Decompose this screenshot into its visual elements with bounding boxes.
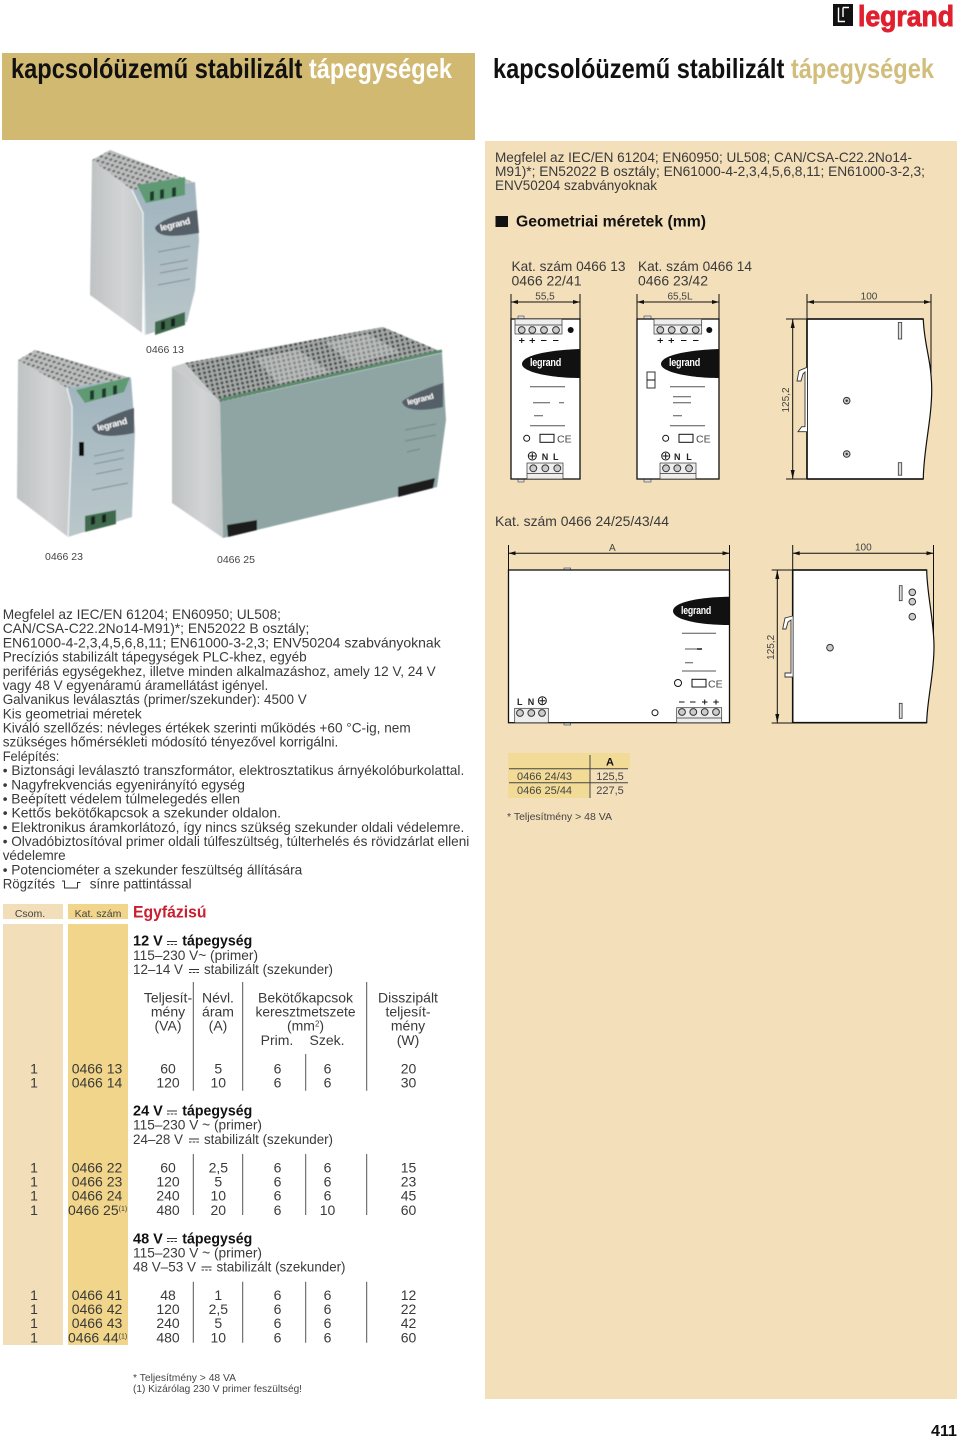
footnotes [133, 1372, 302, 1395]
table header and separators [144, 982, 438, 1091]
table header and separators: Teljesít- [144, 989, 192, 1005]
labels for drawing 0466 14: Kat. szám 0466 14 [638, 258, 752, 274]
photo: power supply 0466 25 [172, 327, 446, 538]
description text block: Megfelel az IEC/EN 61204; EN60950; UL508; [3, 606, 281, 622]
rows: 24 V: 6 [324, 1174, 332, 1190]
description text block: Precíziós stabilizált tápegységek PLC-khez, egyéb [3, 649, 307, 665]
description text block: • Potenciométer a szekunder feszültség állítására [3, 861, 303, 877]
rows: 48 V: (1) [119, 1333, 127, 1340]
rows: 24 V: 6 [274, 1174, 282, 1190]
description text block: • Beépített védelem túlmelegedés ellen [3, 790, 240, 806]
rows: 24 V: 10 [320, 1202, 335, 1218]
technical drawing: front 65,5: legrand [669, 357, 700, 369]
technical drawing: side view large [766, 542, 934, 723]
rows: 48 V: 6 [324, 1315, 332, 1331]
section: 24 V: tápegység [182, 1104, 252, 1120]
technical drawing: front width A: L [517, 697, 523, 707]
technical drawing: front width A: A [609, 543, 616, 554]
technical drawing: front 65,5 [637, 292, 719, 482]
description text block: Galvanikus leválasztás (primer/szekunder): 4500 V [3, 691, 307, 707]
rows: 24 V: 6 [324, 1188, 332, 1204]
rows: 48 V: 6 [274, 1329, 282, 1345]
labels for drawing 0466 14: 0466 23/42 [638, 272, 708, 288]
table header and separators: keresztmetszete [256, 1003, 356, 1019]
rows: 24 V: 1 [30, 1202, 38, 1218]
table header and separators: 2 [315, 1020, 320, 1029]
section: 48 V: 48 V–53 V [133, 1259, 197, 1275]
table header and separators: (A) [209, 1018, 227, 1034]
description text block: Rögzítés [3, 876, 55, 892]
right beige panel [485, 141, 957, 1399]
technical drawing: side view 100: 125,2 [781, 387, 792, 413]
technical drawing: side view large: 100 [855, 542, 872, 554]
rows: 48 V: 1 [30, 1315, 38, 1331]
footnote right: * Teljesítmény > 48 VA [507, 811, 612, 823]
section: 48 V: 48 V [133, 1231, 163, 1247]
technical drawing: front 55,5 [511, 292, 580, 482]
table header and separators: teljesít- [385, 1003, 431, 1019]
rows: 24 V: 0466 24 [72, 1188, 123, 1204]
rows: 24 V: 60 [401, 1202, 416, 1218]
dimension table A: 0466 25/44 [517, 785, 572, 797]
description text block: sínre pattintással [90, 876, 192, 892]
footnotes: * Teljesítmény > 48 VA [133, 1372, 236, 1384]
rows: 48 V: 1 [30, 1287, 38, 1303]
section: 24 V [133, 1104, 333, 1147]
labels for drawing 0466 13: 0466 22/41 [512, 272, 582, 288]
table header and separators: Szek. [309, 1032, 345, 1048]
dimension table A: 0466 24/43 [517, 771, 572, 783]
rows: 24 V: 1 [30, 1174, 38, 1190]
section: 12 V: tápegység [182, 934, 252, 950]
heading: geometric dimensions: Geometriai méretek (mm) [516, 214, 706, 230]
rows: 12 V: 1 [30, 1060, 38, 1076]
table header and separators: (VA) [155, 1018, 181, 1034]
section: 48 V [133, 1231, 346, 1275]
technical drawing: front 65,5: N [674, 452, 681, 462]
section: 48 V: stabilizált (szekunder) [216, 1259, 346, 1275]
description text block: EN61000-4-2,3,4,5,6,8,11; EN61000-3-2,3; ENV50204 szabványoknak [3, 634, 442, 650]
technical drawing: front 55,5: L [553, 452, 559, 462]
table column backgrounds [3, 904, 128, 1345]
caption 0466 13: 0466 13 [146, 344, 184, 356]
rows: 12 V: 10 [211, 1074, 226, 1090]
table column backgrounds: Kat. szám [75, 908, 122, 920]
photo: power supply 0466 13: legrand [159, 216, 191, 233]
section: 48 V: 115–230 V ~ (primer) [133, 1244, 262, 1260]
table header and separators: Disszipált [378, 989, 438, 1005]
rows: 48 V: 0466 44 [68, 1329, 119, 1345]
rows: 12 V: 120 [156, 1074, 180, 1090]
rows: 48 V: 1 [214, 1287, 222, 1303]
section: 12 V: 12 V [133, 934, 163, 950]
section: 48 V: tápegység [182, 1231, 252, 1247]
section: 12 V: 12–14 V [133, 961, 184, 977]
description text block: Kiváló szellőzés: névleges értékek szerinti működés +60 °C-ig, nem [3, 720, 411, 736]
description text block: • Nagyfrekvenciás egyenirányító egység [3, 776, 245, 792]
standards text right: Megfelel az IEC/EN 61204; EN60950; UL508; CAN/CSA-C22.2No14- [495, 149, 912, 165]
description text block: • Olvadóbiztosítóval primer oldali túlfeszültség, túlterhelés és rövidzárlat elleni [3, 833, 469, 849]
description text block: Kis geometriai méretek [3, 705, 143, 721]
rows: 48 V: 10 [211, 1329, 226, 1345]
dimension table A: 125,5 [596, 771, 624, 783]
rows: 48 V: 0466 42 [72, 1301, 123, 1317]
technical drawing: front width A: CE [708, 678, 723, 690]
label for large drawings: Kat. szám 0466 24/25/43/44 [495, 513, 669, 529]
technical drawing: front 55,5: CE [557, 434, 572, 446]
description text block: Felépítés: [3, 748, 59, 764]
rows: 24 V: 6 [274, 1188, 282, 1204]
rows: 48 V: 480 [156, 1329, 180, 1345]
rows: 12 V: 0466 13 [72, 1060, 123, 1076]
technical drawing: front 55,5: 55,5 [535, 292, 555, 302]
rows: 24 V: (1) [119, 1206, 127, 1213]
photo: power supply 0466 13 [90, 150, 199, 335]
rows: 12 V [30, 1060, 416, 1090]
rows: 48 V: 22 [401, 1301, 416, 1317]
rows: 12 V: 1 [30, 1074, 38, 1090]
labels for drawing 0466 13 [512, 258, 626, 288]
table header and separators: (W) [397, 1032, 419, 1048]
rows: 12 V: 6 [324, 1060, 332, 1076]
rows: 24 V: 6 [324, 1159, 332, 1175]
technical drawing: front 65,5: CE [696, 434, 711, 446]
description text block [3, 606, 469, 892]
rows: 12 V: 60 [160, 1060, 176, 1076]
rows: 12 V: 30 [401, 1074, 416, 1090]
technical drawing: front width A: N [528, 697, 534, 707]
rows: 24 V: 45 [401, 1188, 416, 1204]
rows: 48 V: 0466 41 [72, 1287, 123, 1303]
rows: 24 V: 0466 22 [72, 1159, 123, 1175]
section: 24 V: 115–230 V ~ (primer) [133, 1117, 262, 1133]
rows: 24 V: 23 [401, 1174, 416, 1190]
description text block: perifériás egységekhez, illetve minden alkalmazáshoz, amely 12 V, 24 V [3, 663, 436, 679]
rows: 24 V: 10 [211, 1188, 226, 1204]
table header and separators: mény [151, 1003, 185, 1019]
description text block: CAN/CSA-C22.2No14-M91)*; EN52022 B osztály; [3, 620, 309, 636]
description text block: • Biztonsági leválasztó transzformátor, elektrosztatikus árnyékolóburkolattal. [3, 762, 464, 778]
rows: 12 V: 6 [324, 1074, 332, 1090]
rows: 48 V: 6 [324, 1301, 332, 1317]
technical drawing: front 65,5: 65,5L [667, 292, 693, 302]
rows: 24 V: 1 [30, 1188, 38, 1204]
rows: 48 V: 1 [30, 1301, 38, 1317]
rows: 48 V: 5 [214, 1315, 222, 1331]
description text block: védelemre [3, 847, 66, 863]
section: 12 V: stabilizált (szekunder) [204, 961, 333, 977]
description text block: vagy 48 V egyenáramú áramellátást igényel. [3, 677, 268, 693]
dimension table A: A [606, 756, 614, 768]
rows: 24 V: 0466 23 [72, 1174, 123, 1190]
description text block: • Kettős bekötőkapcsok a szekunder oldalon. [3, 805, 281, 821]
rows: 24 V: 6 [274, 1159, 282, 1175]
rows: 48 V: 48 [160, 1287, 176, 1303]
rows: 48 V: 6 [274, 1301, 282, 1317]
rows: 48 V: 42 [401, 1315, 416, 1331]
technical drawing: side view 100 [781, 292, 932, 479]
description text block: szükséges hőmérsékleti módosító tényezővel korrigálni. [3, 734, 338, 750]
rows: 24 V: 240 [156, 1188, 180, 1204]
rows: 24 V [30, 1154, 416, 1218]
standards text right: ENV50204 szabványoknak [495, 177, 658, 193]
rows: 48 V: 240 [156, 1315, 180, 1331]
table header and separators: (mm [287, 1018, 315, 1034]
caption 0466 25: 0466 25 [217, 554, 255, 566]
heading: single phase: Egyfázisú [133, 904, 206, 922]
description text block: • Elektronikus áramkorlátozó, így nincs szükség szekunder oldali védelemre. [3, 819, 464, 835]
photo: power supply 0466 23 [17, 350, 135, 537]
technical drawing: front 65,5: L [686, 452, 692, 462]
footnotes: (1) Kizárólag 230 V primer feszültség! [133, 1383, 302, 1395]
rows: 12 V: 20 [401, 1060, 416, 1076]
rows: 24 V: 6 [274, 1202, 282, 1218]
table header and separators: ) [319, 1018, 324, 1034]
left title band: kapcsolóüzemű stabilizált tápegységek [11, 53, 452, 84]
standards text right: M91)*; EN52022 B osztály; EN61000-4-2,3,4,5,6,8,11; EN61000-3-2,3; [495, 163, 925, 179]
rows: 48 V: 1 [30, 1329, 38, 1345]
rows: 24 V: 60 [160, 1159, 176, 1175]
technical drawing: side view large: 125,2 [766, 634, 777, 660]
table header and separators: Prim. [261, 1032, 293, 1048]
rows: 48 V: 6 [324, 1329, 332, 1345]
rows: 48 V: 6 [274, 1287, 282, 1303]
technical drawing: front width A [508, 543, 730, 725]
rows: 12 V: 0466 14 [72, 1074, 123, 1090]
rows: 48 V: 2,5 [209, 1301, 228, 1317]
technical drawing: front width A: legrand [681, 605, 711, 617]
rows: 24 V: 2,5 [209, 1159, 228, 1175]
rows: 48 V: 6 [274, 1315, 282, 1331]
table header and separators: áram [202, 1003, 234, 1019]
left title band [2, 53, 475, 140]
rows: 48 V: 60 [401, 1329, 416, 1345]
table header and separators: Névl. [202, 989, 234, 1005]
table header and separators: mény [391, 1018, 425, 1034]
rows: 48 V: 120 [156, 1301, 180, 1317]
rows: 12 V: 5 [214, 1060, 222, 1076]
brand logo: legrand [858, 1, 954, 33]
rows: 24 V: 480 [156, 1202, 180, 1218]
right title: kapcsolóüzemű stabilizált tápegységek [493, 53, 934, 84]
photo: power supply 0466 25: legrand [406, 392, 435, 407]
section: 24 V: stabilizált (szekunder) [204, 1131, 333, 1147]
technical drawing: front 55,5: legrand [530, 357, 561, 369]
rows: 48 V: 12 [401, 1287, 416, 1303]
labels for drawing 0466 14 [638, 258, 752, 288]
rows: 24 V: 15 [401, 1159, 416, 1175]
rows: 48 V [30, 1282, 416, 1345]
technical drawing: front 55,5: N [542, 452, 548, 462]
rows: 48 V: 6 [324, 1287, 332, 1303]
photo: power supply 0466 23: legrand [96, 416, 128, 433]
rows: 24 V: 120 [156, 1174, 180, 1190]
section: 12 V [133, 934, 333, 977]
dimension table A [508, 753, 630, 798]
section: 24 V: 24–28 V [133, 1131, 184, 1147]
technical drawing: side view 100: 100 [861, 292, 878, 302]
rows: 24 V: 0466 25 [68, 1202, 119, 1218]
section: 24 V: 24 V [133, 1104, 163, 1120]
standards text right [495, 149, 925, 193]
table column backgrounds: Csom. [15, 908, 45, 920]
labels for drawing 0466 13: Kat. szám 0466 13 [512, 258, 626, 274]
rows: 12 V: 6 [274, 1074, 282, 1090]
rows: 12 V: 6 [274, 1060, 282, 1076]
rows: 24 V: 1 [30, 1159, 38, 1175]
table header and separators: Bekötőkapcsok [258, 989, 354, 1005]
caption 0466 23: 0466 23 [45, 551, 83, 563]
rows: 24 V: 5 [214, 1174, 222, 1190]
section: 12 V: 115–230 V~ (primer) [133, 947, 258, 963]
rows: 24 V: 20 [211, 1202, 226, 1218]
rows: 48 V: 0466 43 [72, 1315, 123, 1331]
dimension table A: 227,5 [596, 785, 624, 797]
